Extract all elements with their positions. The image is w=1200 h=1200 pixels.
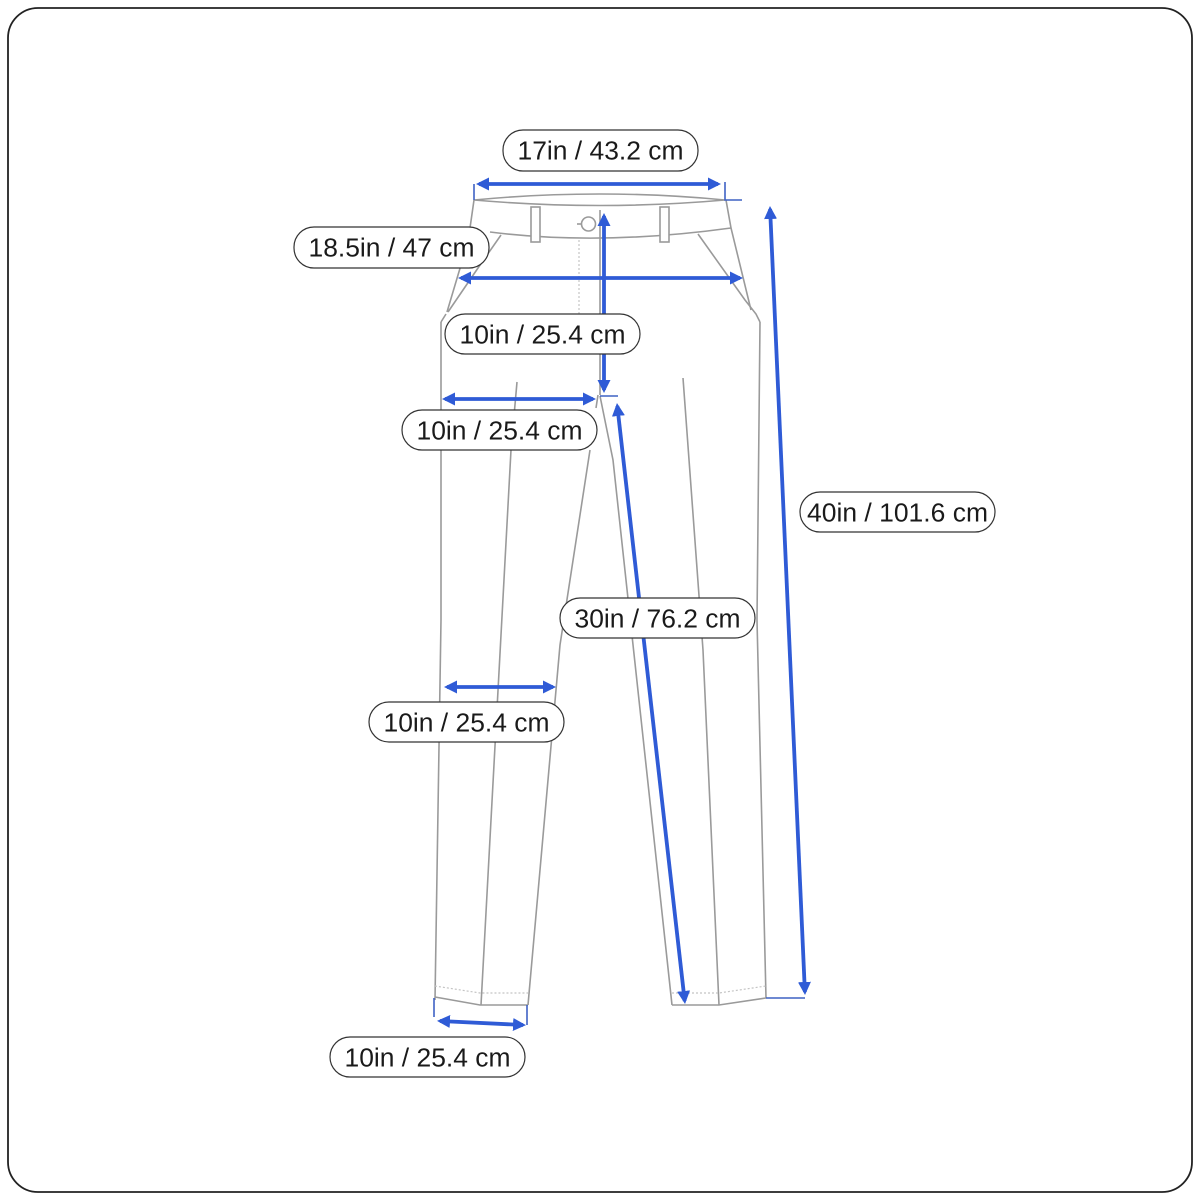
arrow: hip width xyxy=(461,276,740,280)
label: hem 10in: 10in / 25.4 cm xyxy=(344,1044,510,1072)
label: rise 10in: 10in / 25.4 cm xyxy=(460,322,626,350)
label: hem 10in xyxy=(330,1037,525,1077)
label: thigh 10in: 10in / 25.4 cm xyxy=(416,418,582,446)
arrow: outseam xyxy=(770,209,805,992)
arrow: hem width xyxy=(440,1021,523,1025)
label: inseam 30in xyxy=(560,598,755,638)
label: inseam 30in: 30in / 76.2 cm xyxy=(574,606,740,634)
trousers outline xyxy=(435,194,766,1005)
measurement ticks xyxy=(434,182,805,1025)
arrow: knee width xyxy=(447,685,553,689)
label: outseam 40in: 40in / 101.6 cm xyxy=(807,500,988,528)
label: knee 10in: 10in / 25.4 cm xyxy=(384,710,550,738)
label: rise 10in xyxy=(445,314,640,354)
label: knee 10in xyxy=(369,702,564,742)
label: hip 18.5in xyxy=(294,227,489,268)
arrow: thigh width xyxy=(445,397,593,401)
arrow: waist width xyxy=(479,182,718,186)
arrow: inseam xyxy=(617,406,685,1001)
label: thigh 10in xyxy=(402,410,597,450)
label: waist 17in xyxy=(503,130,698,171)
arrow: front rise xyxy=(602,216,606,390)
label: outseam 40in xyxy=(800,492,995,532)
label: hip 18.5in: 18.5in / 47 cm xyxy=(308,234,474,262)
label: waist 17in: 17in / 43.2 cm xyxy=(518,138,684,166)
